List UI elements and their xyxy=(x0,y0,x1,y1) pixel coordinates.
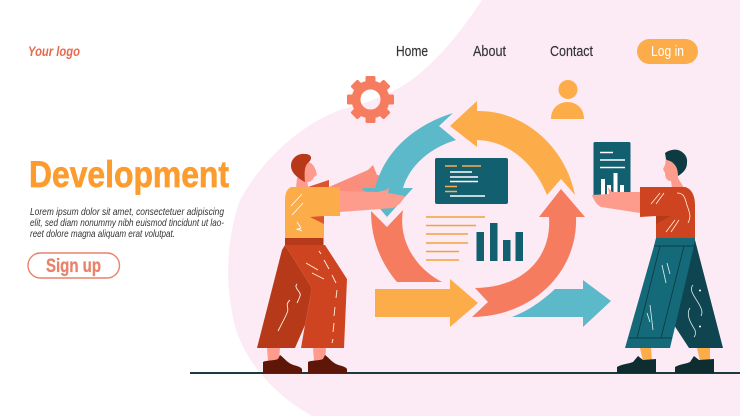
background blob xyxy=(228,0,740,416)
shoes xyxy=(263,355,347,373)
trousers front leg xyxy=(285,245,347,348)
bar chart xyxy=(476,223,523,261)
icon: user xyxy=(551,80,584,119)
cycle arrow: teal xyxy=(362,113,456,217)
login button: Log in xyxy=(651,43,684,60)
body text: elit, sed diam nonummy nibh euismod tincidunt ut lao- xyxy=(30,217,224,229)
text lines beside chart xyxy=(426,217,485,260)
body text xyxy=(30,206,224,240)
shirt xyxy=(285,187,340,238)
icon: gear xyxy=(347,76,394,123)
title: Development xyxy=(29,154,229,195)
cycle arrow: salmon right xyxy=(472,189,585,317)
document with chart xyxy=(594,142,630,197)
ground line xyxy=(190,372,740,374)
cycle arrow: orange xyxy=(450,101,575,195)
legs xyxy=(640,348,710,361)
trousers back leg xyxy=(257,245,312,348)
sign up button: Sign up xyxy=(46,256,101,277)
nav: about: About xyxy=(473,43,507,60)
person: left man xyxy=(257,154,405,373)
navigation xyxy=(396,39,698,64)
belt xyxy=(285,238,324,245)
arm xyxy=(592,187,640,213)
front arm xyxy=(340,188,405,212)
arrow: teal right xyxy=(512,280,611,327)
body text: Lorem ipsum dolor sit amet, consectetuer adipiscing xyxy=(30,206,224,218)
shoes xyxy=(617,356,714,373)
hair xyxy=(665,150,687,176)
body text: reet dolore magna aliquam erat volutpat. xyxy=(30,228,175,240)
trousers back leg xyxy=(674,240,723,348)
trousers front leg xyxy=(625,246,694,348)
cycle arrow: salmon left xyxy=(371,210,442,282)
head xyxy=(303,162,317,182)
nav: home: Home xyxy=(396,43,428,60)
left man back arm xyxy=(329,165,400,195)
hair xyxy=(291,154,311,182)
legs xyxy=(267,348,326,361)
shirt xyxy=(640,187,695,238)
sign up button xyxy=(28,253,120,278)
waistband xyxy=(654,238,695,246)
header logo: Your logo xyxy=(28,43,80,59)
collar and neck xyxy=(296,178,329,188)
code screen xyxy=(435,158,508,204)
person: right man xyxy=(592,150,723,373)
login button xyxy=(637,39,698,64)
neck and face xyxy=(663,158,684,188)
nav: contact: Contact xyxy=(550,43,594,60)
arrow: orange right xyxy=(375,279,478,327)
